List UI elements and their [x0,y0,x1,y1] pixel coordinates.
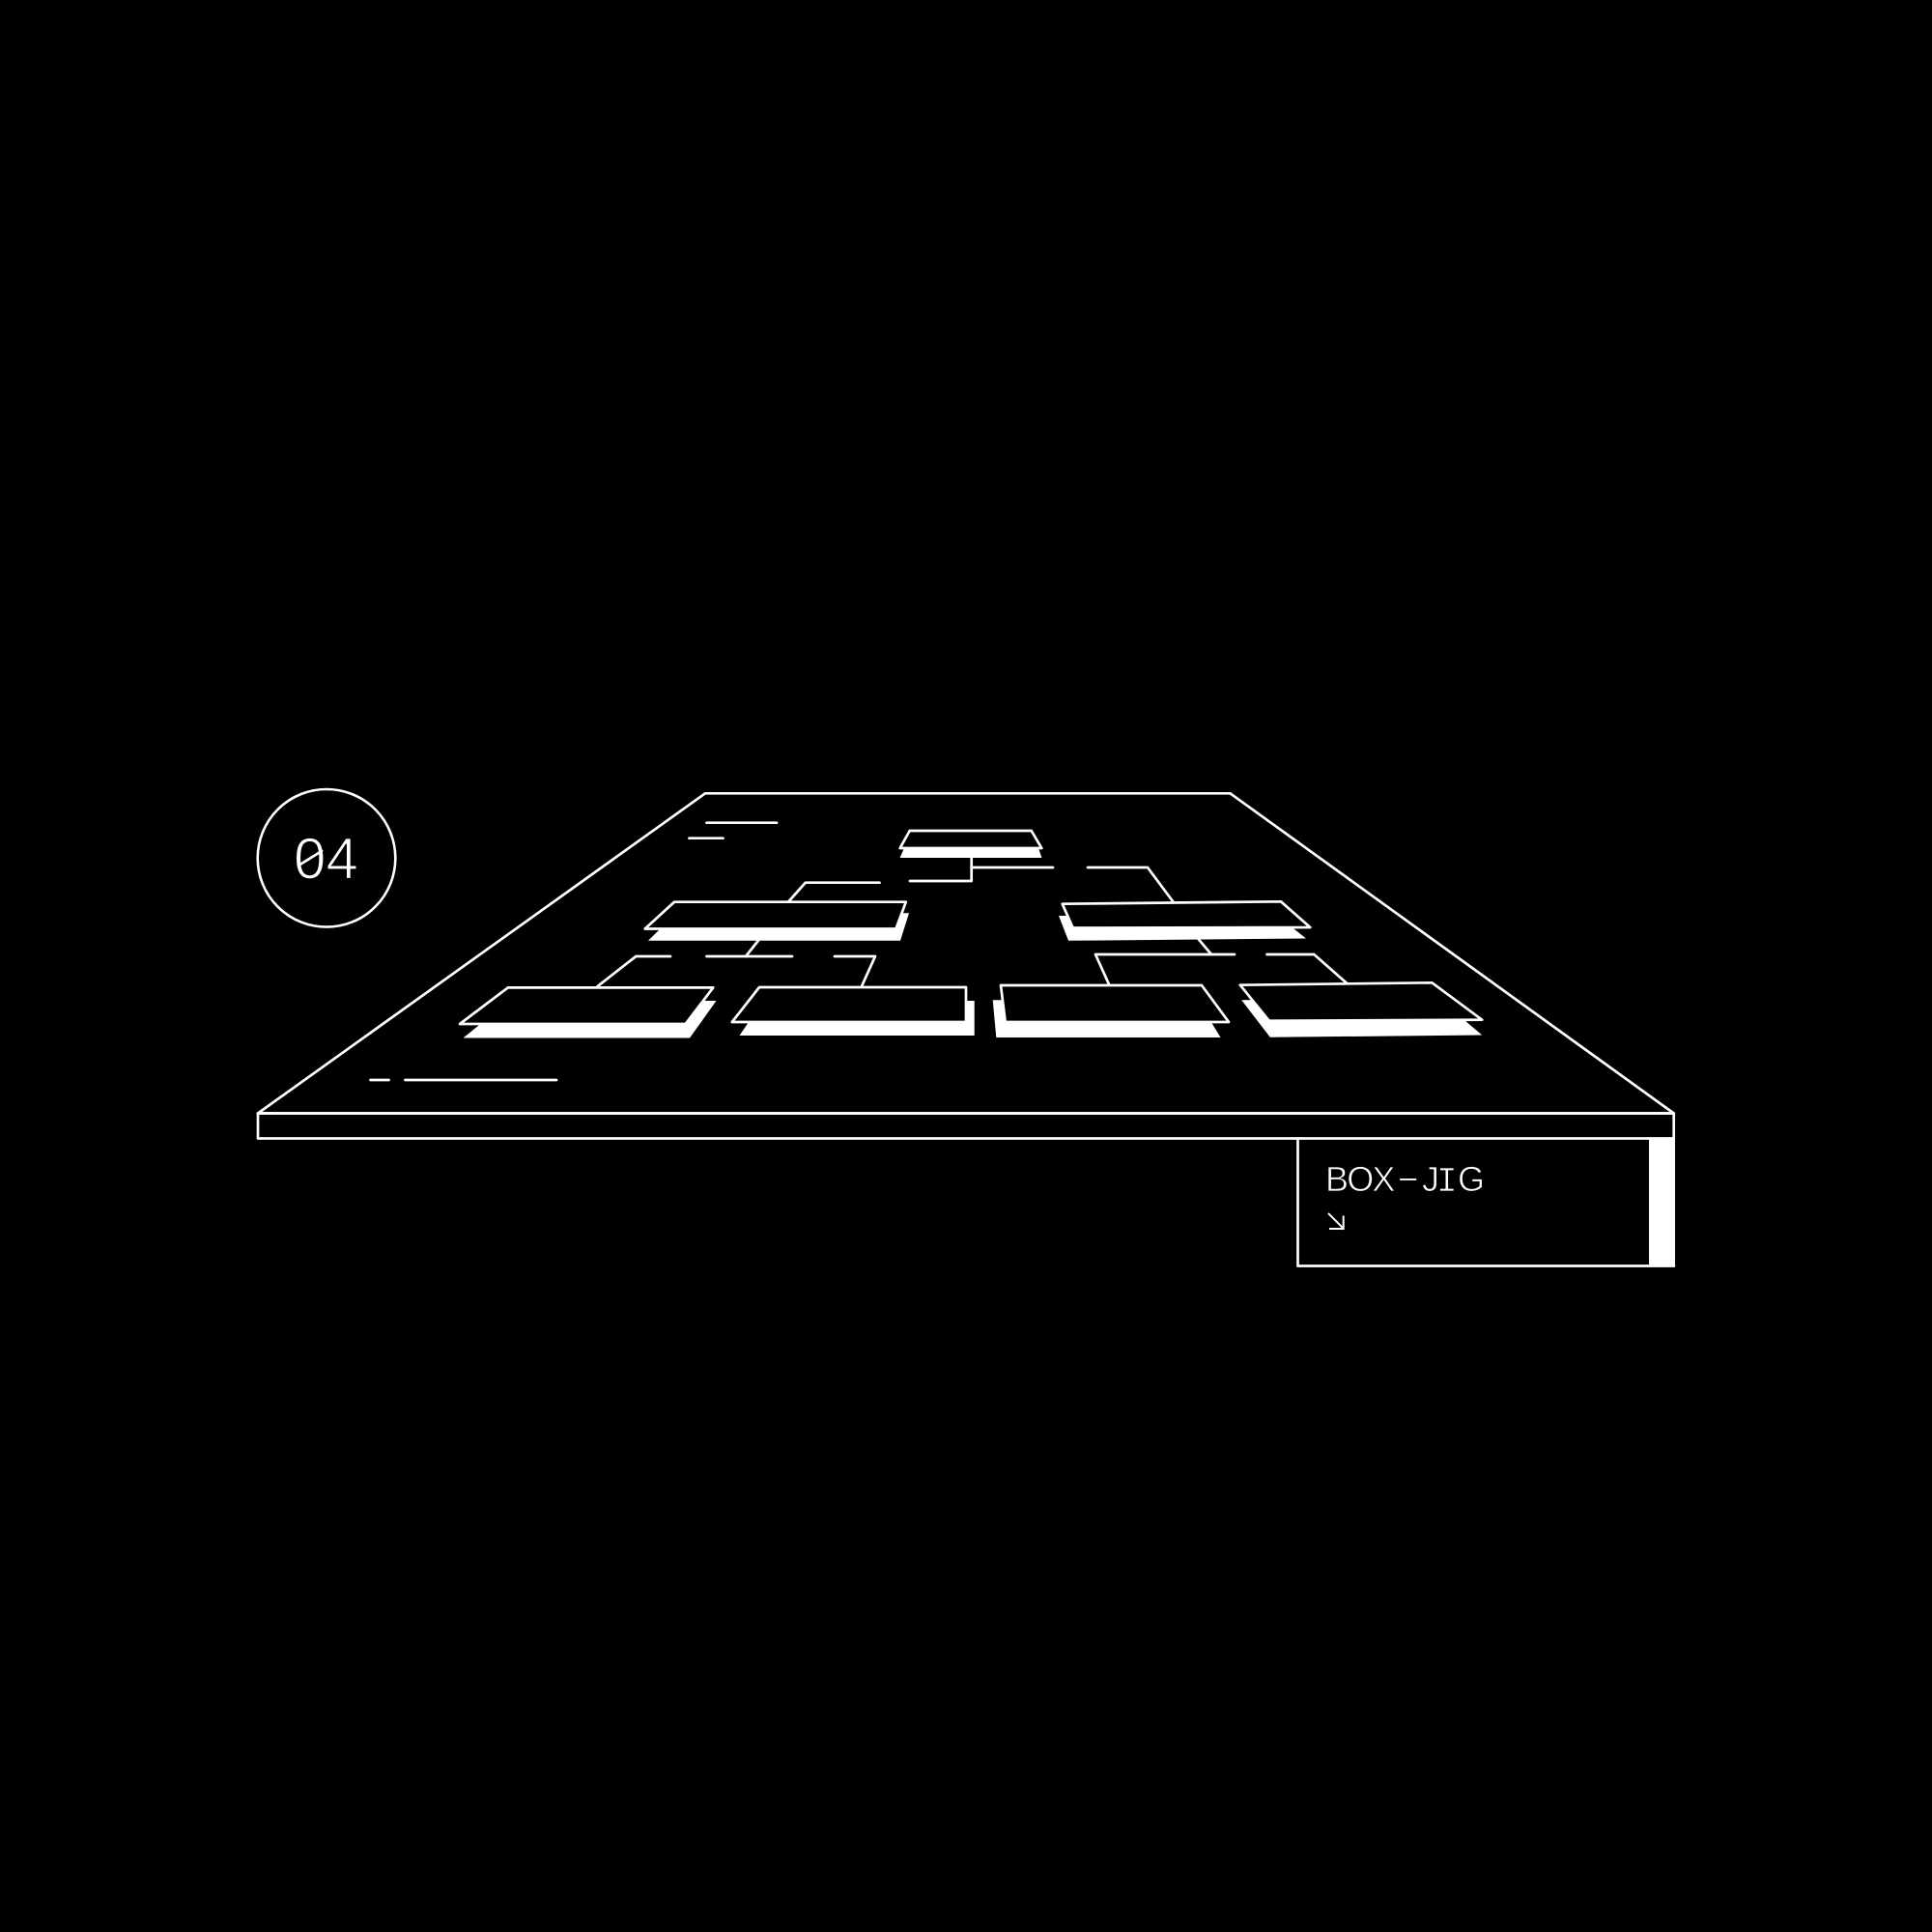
node: third row fourth [1240,982,1482,1037]
note lines: upper left [690,823,777,838]
node: third row second [732,987,975,1036]
node: second row right [1059,901,1310,941]
label box: BOX – JIG [1298,1139,1675,1266]
badge: step number 04: 0 [294,827,326,891]
label text: BOX [1325,1159,1395,1199]
label text: G [1458,1159,1485,1199]
badge: step number 04 [258,789,395,927]
connectors: top node to second row [788,857,1175,903]
icon: down-right arrow [1328,1213,1344,1229]
platform: front edge [258,1113,1674,1138]
label text: I [1436,1162,1458,1202]
node: third row third [993,985,1229,1037]
label text: – [1400,1160,1417,1194]
label text: J [1422,1159,1439,1199]
connectors: left branch to third row [598,940,875,986]
node: second row left [645,902,909,941]
platform: top surface [258,793,1674,1113]
note lines: lower left [371,1079,556,1081]
badge: step number 04: 4 [327,827,358,891]
node: top centre [900,831,1041,858]
connectors: right branch to third row [1095,939,1348,984]
node: third row first [460,987,717,1037]
